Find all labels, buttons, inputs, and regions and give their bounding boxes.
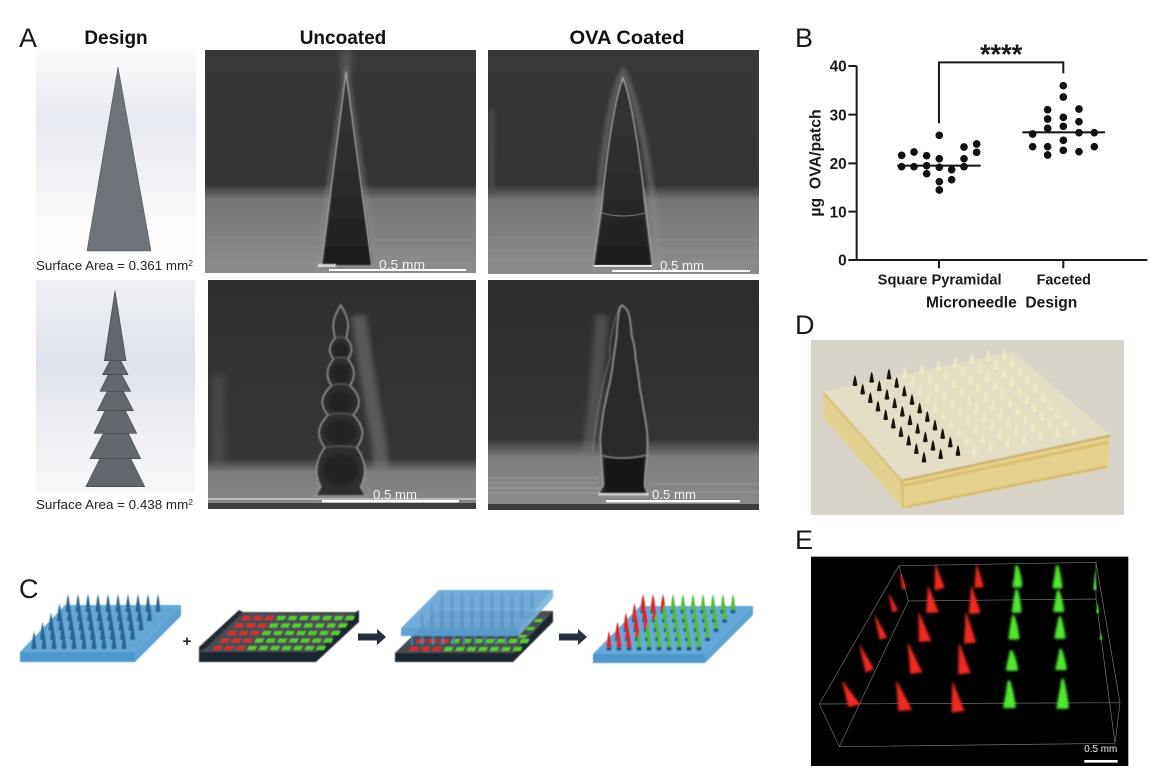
category: Square Pyramidal: Square Pyramidal: [878, 272, 1002, 288]
panel label A: A: [19, 23, 37, 53]
significance stars: ****: [980, 38, 1023, 69]
SEM image: OVA coated faceted: 0.5 mm: [652, 487, 696, 502]
heading: Uncoated: Uncoated: [300, 28, 386, 49]
arrow 1: [358, 629, 386, 645]
SEM image: OVA coated faceted: [488, 280, 759, 510]
tick labels: [830, 59, 847, 270]
bounding box lines: [819, 562, 1120, 747]
heading: Design: Design: [84, 28, 148, 49]
faint green edge needles: [1093, 569, 1102, 640]
category: Faceted: Faceted: [1037, 272, 1091, 288]
tick labels: 20: [830, 156, 847, 173]
panel label B: B: [795, 23, 813, 53]
coated black needles: [853, 368, 960, 462]
SEM image: uncoated faceted: 0.5 mm: [373, 487, 417, 502]
heading: OVA Coated: OVA Coated: [570, 28, 684, 49]
significance bracket: [939, 62, 1063, 123]
schematic: blue microneedle patch: [20, 594, 181, 662]
schematic: coated patch with red and green needles: [593, 594, 753, 663]
red needles: [843, 565, 983, 712]
caption: surface area 0.361: 2: [188, 259, 194, 268]
scale label: 0.5 mm: [1084, 744, 1117, 755]
caption: surface area 0.438: 2: [188, 498, 194, 507]
uncoated pale needles: [903, 348, 1076, 454]
panel label D: D: [795, 310, 814, 340]
SEM image: OVA coated square pyramidal: 0.5 mm: [660, 258, 704, 273]
tick labels: 0: [838, 253, 847, 270]
caption: surface area 0.438: Surface Area = 0.438 mm: [36, 498, 178, 512]
tick labels: 30: [830, 107, 847, 124]
tick labels: 40: [830, 59, 847, 76]
design render: square pyramidal needle: [36, 51, 196, 272]
green needles: [1005, 567, 1067, 707]
x axis title: Microneedle Design: [926, 295, 1077, 312]
plus sign: +: [183, 633, 192, 650]
y axis title: µg OVA/patch: [808, 109, 825, 217]
schematic: coating tray with red and green wells: [199, 610, 359, 662]
panel label C: C: [19, 574, 38, 604]
SEM image: uncoated square pyramidal: [205, 46, 476, 273]
photo: dual-coated microneedle patch: [811, 340, 1124, 515]
SEM image: uncoated faceted: [208, 280, 476, 509]
fluorescence image: red and green microneedles: [811, 557, 1128, 766]
SEM image: uncoated square pyramidal: 0.5 mm: [379, 257, 425, 272]
SEM image: OVA coated square pyramidal: [488, 50, 759, 274]
arrow 2: [559, 629, 587, 645]
caption: surface area 0.361: Surface Area = 0.361 mm: [36, 259, 178, 273]
panel label E: E: [795, 525, 813, 555]
tick labels: 10: [830, 204, 847, 221]
slab: [823, 352, 1110, 509]
axes: [848, 66, 1147, 268]
chart: OVA per patch dot plot: [808, 38, 1147, 312]
scale bar: [1084, 760, 1118, 763]
schematic: patch lowered onto tray: [395, 590, 553, 662]
dots: square pyramidal: [897, 131, 981, 194]
design render: faceted needle: [36, 280, 195, 492]
dots: faceted: [1022, 82, 1105, 159]
